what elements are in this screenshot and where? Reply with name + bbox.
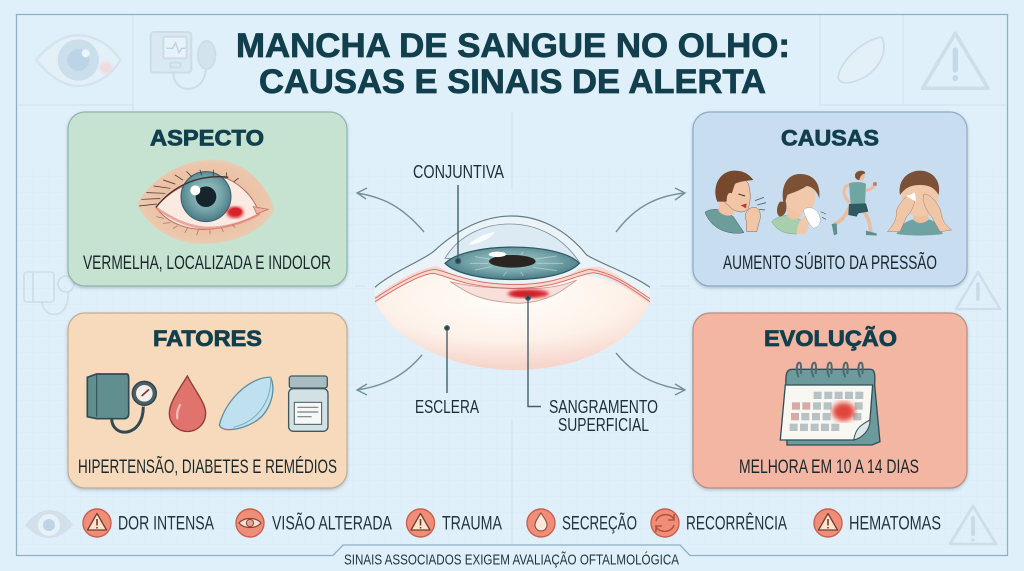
heading: fatores: FATORES xyxy=(153,326,262,351)
conjunctiva dome xyxy=(375,216,650,302)
icon: person sneezing in tissue xyxy=(772,174,826,234)
faded icon: warning top right xyxy=(923,33,988,88)
lower pocket xyxy=(450,280,577,303)
caption: fatores: HIPERTENSÃO, DIABETES E REMÉDIOS xyxy=(78,456,337,478)
faded icon: warning right xyxy=(956,272,1000,309)
icon: blood drop xyxy=(169,376,206,431)
heading: aspecto: ASPECTO xyxy=(150,126,264,150)
heading: evolucao: EVOLUÇÃO xyxy=(764,326,897,351)
title: MANCHA DE SANGUE NO OLHO: xyxy=(236,27,790,65)
alert: hematomas: HEMATOMAS xyxy=(849,512,941,534)
alert: trauma xyxy=(406,509,502,537)
alert: dor intensa: DOR INTENSA xyxy=(118,512,214,534)
title xyxy=(236,27,790,101)
panel: causas xyxy=(693,112,967,286)
icon: eye with red spot xyxy=(137,159,275,244)
icon: person running xyxy=(832,171,877,236)
icon: person covering eyes xyxy=(887,171,952,235)
conjunctival vessels xyxy=(375,269,650,302)
faded icon: contact lens top xyxy=(838,37,884,83)
panel: aspecto xyxy=(68,112,347,286)
icon: medicine bottle xyxy=(289,376,328,431)
leader: sangramento xyxy=(526,296,541,406)
alert: visao alterada: VISÃO ALTERADA xyxy=(272,510,392,534)
faded icon: warning bottom right xyxy=(950,506,996,544)
footer note: SINAIS ASSOCIADOS EXIGEM AVALIAÇÃO OFTALMOLÓGICA xyxy=(344,552,679,568)
caption: causas: AUMENTO SÚBITO DA PRESSÃO xyxy=(723,252,937,274)
arrow: to causas xyxy=(616,188,685,232)
leader: esclera xyxy=(445,326,449,393)
central eye diagram xyxy=(375,216,650,370)
pupil xyxy=(489,255,536,268)
icon: calendar xyxy=(780,363,880,445)
caption: aspecto: VERMELHA, LOCALIZADA E INDOLOR xyxy=(83,253,331,274)
label: conjuntiva: CONJUNTIVA xyxy=(413,161,505,182)
faded icon: eye top left xyxy=(36,35,121,86)
alert row xyxy=(83,509,941,537)
alert: trauma: TRAUMA xyxy=(442,512,502,534)
label: esclera: ESCLERA xyxy=(415,396,479,417)
arrow: to fatores xyxy=(357,355,422,395)
caption: evolucao: MELHORA EM 10 A 14 DIAS xyxy=(739,457,919,478)
iris xyxy=(445,247,579,280)
alert: visao alterada xyxy=(236,509,392,537)
alert: hematomas xyxy=(814,509,941,537)
faded icon: blood pressure left xyxy=(24,272,74,314)
leader: conjuntiva xyxy=(455,185,461,264)
panel: fatores xyxy=(68,313,347,488)
alert: recorrencia: RECORRÊNCIA xyxy=(686,512,787,534)
label: sangramento superficial: SUPERFICIAL xyxy=(558,414,649,435)
label: sangramento superficial: SANGRAMENTO xyxy=(549,396,658,417)
alert: secrecao: SECREÇÃO xyxy=(562,510,637,534)
alert: dor intensa xyxy=(83,509,214,537)
faded icon: blood pressure monitor top xyxy=(151,32,215,89)
hemorrhage xyxy=(508,289,549,298)
arrow: to aspecto xyxy=(357,188,424,232)
icon: person coughing xyxy=(705,171,766,233)
heading: causas: CAUSAS xyxy=(781,126,879,150)
title: CAUSAS E SINAIS DE ALERTA xyxy=(259,63,766,101)
faded icon: eye bottom left xyxy=(25,510,73,538)
label: sangramento superficial xyxy=(549,396,658,435)
sclera xyxy=(375,274,650,370)
icon: blood pressure cuff xyxy=(87,374,156,432)
icon: contact lens xyxy=(219,377,273,430)
alert: recorrencia xyxy=(651,509,787,537)
panel: evolucao xyxy=(693,313,967,488)
alert: secrecao xyxy=(527,509,637,537)
arrow: to evolucao xyxy=(616,353,685,395)
